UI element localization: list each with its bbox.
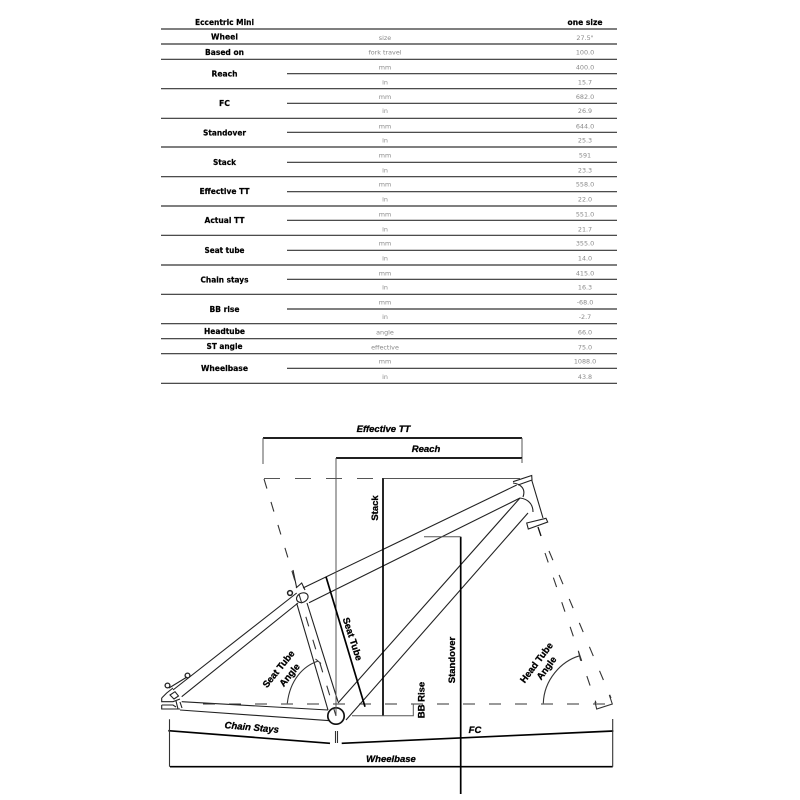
row: Standover: 644.0 [576, 122, 594, 130]
dashed axis lines [203, 478, 612, 716]
row: Stack: mm [379, 152, 391, 160]
table header [161, 18, 617, 29]
row: BB rise: -2.7 [579, 313, 591, 321]
row: Seat tube [161, 239, 617, 265]
row: BB rise: -68.0 [577, 298, 593, 306]
row: Actual TT: mm [379, 210, 391, 218]
row: FC: FC [219, 99, 230, 108]
row: Standover: 25.3 [578, 136, 592, 144]
row: Standover [161, 122, 617, 147]
row: FC: 682.0 [576, 93, 594, 101]
seat stays [173, 593, 298, 697]
row: Actual TT: 21.7 [578, 225, 592, 233]
row: Headtube: Headtube [204, 327, 246, 336]
row: FC: in [382, 107, 388, 115]
row: BB rise: mm [379, 298, 391, 306]
label: Seat Tube Angle: Seat Tube [261, 649, 297, 690]
seat tube angle arc [287, 659, 321, 703]
seat cluster [288, 570, 310, 604]
row: Based on: 100.0 [576, 49, 594, 57]
row: FC [161, 93, 617, 118]
row: Chain stays: Chain stays [200, 276, 249, 285]
row: Effective TT: 22.0 [578, 195, 592, 203]
row: Standover: in [382, 136, 388, 144]
row: Seat tube: 14.0 [578, 254, 592, 262]
row: Reach: mm [379, 63, 391, 71]
row: Seat tube: mm [379, 239, 391, 247]
row: Based on: fork travel [368, 49, 402, 57]
row: Wheelbase: 43.8 [578, 373, 592, 381]
row: Reach: 400.0 [576, 63, 594, 71]
row: Stack: Stack [213, 158, 237, 167]
row: Actual TT: 551.0 [576, 210, 594, 218]
front axle bracket [595, 695, 612, 709]
standover dimension [460, 537, 462, 794]
head tube dashed lines [545, 551, 611, 703]
horizontal dashed stack line [264, 478, 382, 480]
row: Seat tube: 355.0 [576, 239, 594, 247]
wheelbase dimension [170, 766, 613, 768]
row: ST angle: effective [371, 343, 399, 351]
row: Stack: 591 [579, 152, 591, 160]
row: BB rise [161, 298, 617, 324]
reach dimension [336, 457, 522, 459]
row: Chain stays: 415.0 [576, 269, 594, 277]
row: BB rise: BB rise [210, 305, 240, 314]
label: Seat Tube Angle: Angle [277, 662, 303, 689]
row: Headtube [161, 327, 617, 339]
table header: one size [568, 18, 603, 27]
rear dropout [162, 673, 190, 709]
row: ST angle: ST angle [206, 342, 243, 351]
label: Reach: Reach [412, 444, 440, 455]
down tube [338, 498, 528, 720]
row: Actual TT: Actual TT [204, 216, 245, 225]
row: FC: mm [379, 93, 391, 101]
row: Wheelbase: 1088.0 [574, 357, 596, 365]
label: BB Rise: BB Rise [416, 682, 428, 718]
row: Effective TT: in [382, 195, 388, 203]
row: Actual TT [161, 210, 617, 235]
bottom bracket [328, 708, 344, 724]
seat tube [297, 603, 338, 710]
head tube [513, 476, 548, 536]
seat tube centre dashed line [264, 479, 336, 716]
bottom bracket horizontal dashed line [203, 703, 608, 705]
row: Wheelbase: in [382, 373, 388, 381]
stack dimension [382, 478, 384, 716]
geometry table [161, 18, 617, 383]
row: Wheelbase: mm [379, 357, 391, 365]
row: Reach: in [382, 79, 388, 87]
row: Wheelbase: Wheelbase [201, 364, 249, 373]
bike frame geometry diagram [162, 424, 613, 794]
head tube angle arc [543, 651, 581, 703]
effective top tube dimension [263, 437, 522, 439]
row: Effective TT: Effective TT [200, 187, 250, 196]
row: Stack: in [382, 166, 388, 174]
dimension lines [168, 438, 613, 794]
label: Wheelbase: Wheelbase [366, 754, 417, 765]
row: BB rise: in [382, 313, 388, 321]
row: Chain stays: in [382, 283, 388, 291]
row: Chain stays: mm [379, 269, 391, 277]
row: Wheel [161, 32, 617, 44]
row: Wheel: Wheel [211, 32, 238, 42]
row: Reach: 15.7 [578, 79, 592, 87]
row: Stack: 23.3 [578, 166, 592, 174]
row: Reach [161, 63, 617, 89]
row: Wheel: size [379, 34, 391, 42]
row: Seat tube: Seat tube [204, 246, 245, 255]
label: Seat Tube: Seat Tube [340, 616, 364, 662]
row: Effective TT [161, 181, 617, 206]
row: Wheel: 27.5" [576, 34, 594, 42]
table header: Eccentric Mini [195, 18, 254, 27]
row: Based on: Based on [205, 48, 244, 57]
diagram labels [224, 424, 559, 765]
row: Based on [161, 48, 617, 59]
row: Wheelbase [161, 357, 617, 383]
row: ST angle: 75.0 [578, 343, 592, 351]
row: FC: 26.9 [578, 107, 592, 115]
row: Effective TT: 558.0 [576, 181, 594, 189]
row: Chain stays [161, 269, 617, 294]
chain stays [180, 702, 330, 721]
row: Chain stays: 16.3 [578, 283, 592, 291]
row: Headtube: 66.0 [578, 328, 592, 336]
front centre dimension [342, 731, 613, 743]
row: Standover: Standover [203, 129, 246, 138]
row: Stack [161, 152, 617, 177]
label: Chain Stays: Chain Stays [224, 720, 279, 736]
chain stays dimension [168, 731, 330, 743]
row: Actual TT: in [382, 225, 388, 233]
label: Standover: Standover [447, 636, 458, 683]
seat tube dimension [326, 577, 365, 707]
label: Effective TT: Effective TT [357, 424, 412, 435]
label: FC: FC [469, 725, 481, 736]
frame tubes [162, 476, 548, 724]
label: Head Tube Angle: Angle [535, 655, 559, 682]
row: ST angle [161, 342, 617, 354]
row: Headtube: angle [376, 328, 394, 336]
row: Reach: Reach [212, 70, 238, 79]
label: Head Tube Angle: Head Tube [518, 641, 556, 685]
row: Effective TT: mm [379, 181, 391, 189]
top tube [303, 485, 520, 603]
row: Standover: mm [379, 122, 391, 130]
row: Seat tube: in [382, 254, 388, 262]
label: Stack: Stack [370, 495, 381, 521]
